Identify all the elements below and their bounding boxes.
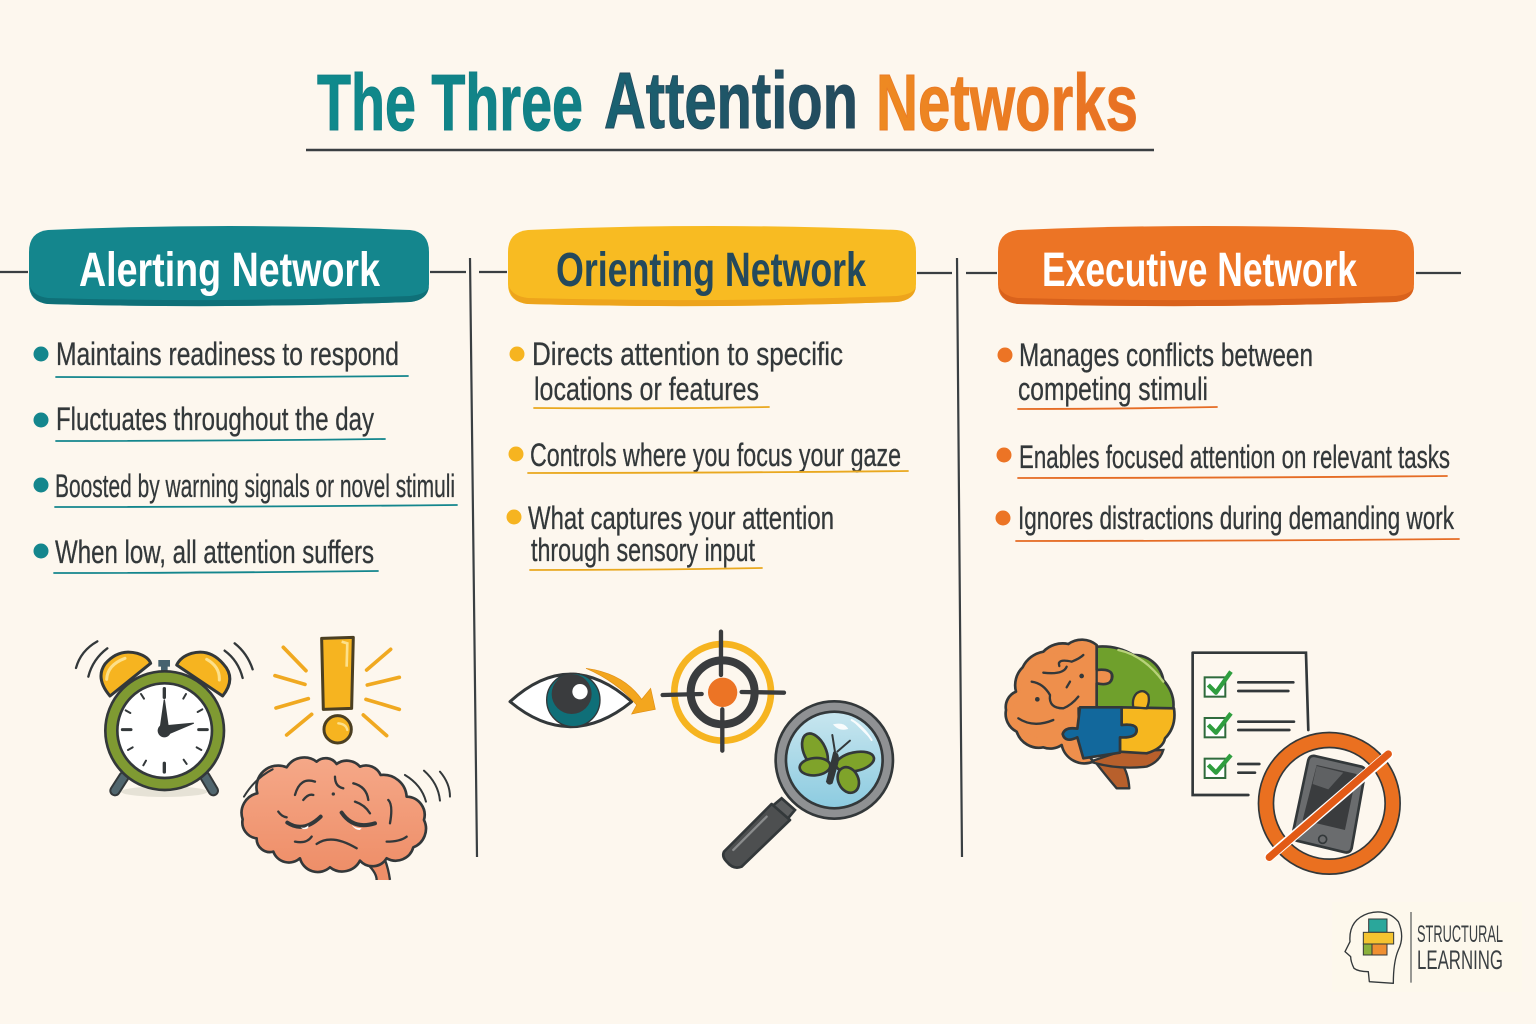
title — [306, 56, 1154, 150]
bullet list: executive: Manages conflicts between — [1019, 337, 1313, 373]
icon: alarm clock — [76, 641, 253, 797]
panel: alerting network — [29, 226, 457, 880]
bullet list: orienting: Directs attention to specific — [532, 336, 843, 372]
title: Networks — [876, 58, 1138, 147]
title: The Three — [317, 58, 583, 147]
icon: eye with arrow — [510, 668, 655, 727]
heading: orienting network: Orienting Network — [556, 244, 866, 297]
bullet list: alerting: Fluctuates throughout the day — [56, 401, 374, 437]
panel: orienting network — [506, 226, 916, 868]
bullet list: orienting: locations or features — [534, 371, 759, 407]
bullet list: orienting — [506, 336, 908, 570]
heading: executive network: Executive Network — [1042, 244, 1357, 297]
heading: executive network — [998, 226, 1414, 306]
bullet list: alerting: When low, all attention suffers — [55, 534, 374, 570]
icon: tired brain — [242, 758, 450, 880]
bullet list: executive — [996, 337, 1459, 541]
heading: alerting network — [29, 226, 429, 306]
bullet list: alerting — [34, 336, 457, 573]
logo: structural learning — [1332, 902, 1522, 992]
icon: no phone — [1266, 740, 1393, 867]
icon: target — [663, 632, 784, 751]
icon: puzzle brain — [1006, 640, 1174, 788]
panel: executive network — [996, 226, 1459, 867]
icon: checklist — [1193, 653, 1308, 795]
bullet list: alerting: Maintains readiness to respond — [56, 336, 399, 372]
bullet list: orienting: through sensory input — [531, 532, 755, 568]
icon: exclamation mark — [275, 637, 399, 743]
heading: orienting network — [508, 226, 916, 306]
bullet list: alerting: Boosted by warning signals or novel stimuli — [55, 468, 455, 504]
heading: alerting network: Alerting Network — [79, 244, 380, 297]
bullet list: orienting: Controls where you focus your gaze — [530, 437, 901, 473]
title: Attention — [604, 56, 858, 145]
bullet list: executive: competing stimuli — [1018, 371, 1208, 407]
icon: magnifying glass with butterfly — [723, 701, 893, 868]
bullet list: orienting: What captures your attention — [528, 500, 834, 536]
